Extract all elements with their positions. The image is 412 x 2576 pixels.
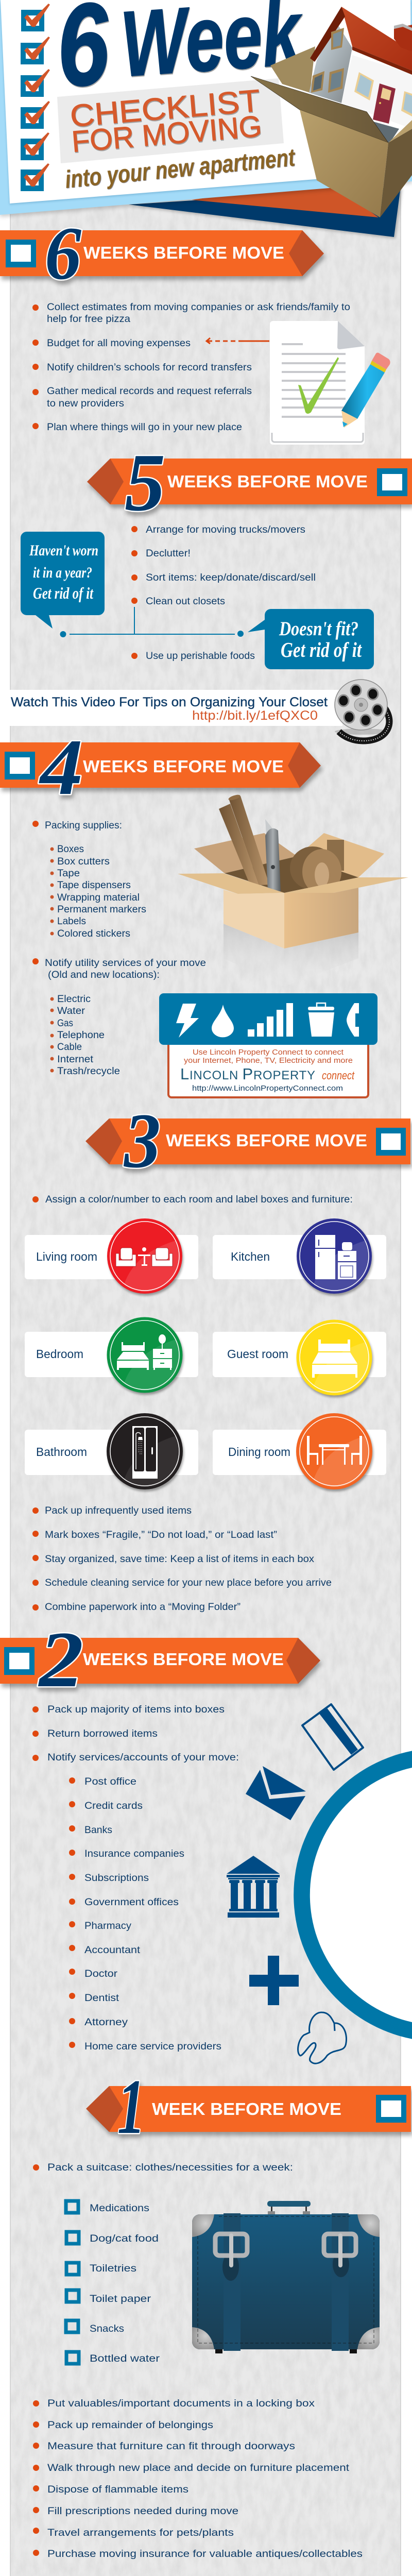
ribbon: 6 weeks before move: [0, 211, 324, 295]
item: return: Return borrowed items: [47, 1728, 158, 1739]
callout: haven't worn it: it in a year?: [33, 564, 92, 581]
check item: snacks: [66, 2320, 124, 2334]
item: medical: Gather medical records and request referrals: [47, 386, 252, 397]
item: declutter: Declutter!: [146, 548, 191, 559]
list: 6 weeks: [32, 302, 350, 433]
check item: water: Bottled water: [90, 2353, 160, 2364]
sub-list: services: [69, 1776, 221, 2052]
check item: pet food: Dog/cat food: [90, 2233, 159, 2244]
sub-list: supplies: [50, 844, 146, 939]
check item: pet food: [66, 2232, 159, 2244]
item: estimates: Collect estimates from moving companies or ask friends/family to: [47, 302, 350, 313]
ribbon number: 3: [123, 1097, 161, 1184]
check item: toilet paper: [66, 2290, 151, 2304]
item: estimates: [32, 302, 350, 325]
sub-list: supplies: Tape: [57, 868, 80, 879]
item: cleaning: Schedule cleaning service for your new place before you arrive: [45, 1578, 332, 1588]
item: closets: Clean out closets: [146, 596, 225, 607]
item: flammable: Dispose of flammable items: [47, 2484, 188, 2495]
left front flap: [178, 873, 284, 894]
box cutter: [265, 819, 281, 891]
check item: medications: Medications: [90, 2203, 149, 2214]
ribbon checkbox: [4, 1647, 35, 1675]
box reflection: [224, 924, 284, 987]
checklist: suitcase contents: [66, 2201, 160, 2364]
sub-list: services: Home care service providers: [84, 2041, 221, 2052]
list: 2 weeks: [32, 1704, 239, 2052]
callout: haven't worn it: [21, 532, 105, 629]
sub-list: supplies: Boxes: [57, 844, 84, 855]
timeline connector: [60, 607, 244, 637]
handle: [267, 2201, 311, 2214]
list: packing supplies: [32, 820, 206, 1077]
item: measure: Measure that furniture can fit through doorways: [47, 2441, 295, 2452]
ribbon heading: WEEKS BEFORE MOVE: [83, 757, 284, 776]
callout: doesn't fit: Get rid of it: [281, 638, 362, 662]
sub-list: supplies: Box cutters: [57, 856, 110, 867]
video tip band: Watch This Video For Tips on Organizing Your Closet: [11, 695, 328, 709]
item: budget: Budget for all moving expenses: [47, 338, 191, 349]
room: kitchen: Kitchen: [231, 1250, 270, 1263]
callout: doesn't fit: Doesn't fit?: [279, 618, 358, 640]
ribbon number: 2: [38, 1615, 83, 1704]
item: notify services: Notify services/accounts of your move:: [47, 1752, 239, 1763]
icon: checklist document and pencil: [270, 321, 390, 445]
large ring circle: [294, 1751, 412, 2039]
connect info card: connect: [322, 1069, 355, 1082]
sub-list: supplies: Labels: [57, 916, 86, 927]
room: guest room: [213, 1320, 386, 1395]
ribbon heading: WEEKS BEFORE MOVE: [83, 1650, 284, 1669]
sub-list: services: Subscriptions: [84, 1873, 149, 1884]
sub-list: supplies: Permanent markers: [57, 904, 146, 915]
room: bedroom: Bedroom: [36, 1347, 83, 1361]
item: stay organized: Stay organized, save time: Keep a list of items in each box: [45, 1554, 315, 1565]
item: estimates: help for free pizza: [47, 314, 130, 325]
callout: doesn't fit: [248, 609, 374, 669]
item: pets: Travel arrangements for pets/plants: [47, 2528, 234, 2538]
room: guest room: Guest room: [227, 1347, 288, 1361]
panel: utility connect: [159, 993, 377, 1097]
icon: envelope: [246, 1766, 306, 1820]
buckles: [215, 2233, 356, 2267]
room: bathroom: [25, 1413, 198, 1489]
sub-list: services: Accountant: [84, 1945, 141, 1956]
subtitle: Checklist for moving: [68, 83, 263, 159]
sub-list: utilities: Trash/recycle: [57, 1066, 120, 1077]
item: medical: [32, 386, 252, 409]
left face: [224, 890, 284, 948]
item: prescriptions: Fill prescriptions needed during move: [47, 2506, 238, 2517]
ribbon heading: WEEKS BEFORE MOVE: [166, 1131, 367, 1150]
check item: toiletries: Toiletries: [90, 2263, 136, 2274]
icon: signal bars: [248, 1003, 293, 1037]
video tip band: http://bit.ly/1efQXC0: [192, 708, 318, 723]
sub-list: supplies: Colored stickers: [57, 928, 130, 939]
straps: [224, 2213, 349, 2351]
icon: bank: [227, 1856, 280, 1918]
house in box illustration: [251, 7, 412, 217]
room: dining room: [213, 1413, 386, 1489]
sub-list: services: Post office: [84, 1776, 136, 1787]
callout: haven't worn it: Haven't worn: [29, 542, 98, 559]
ribbon: 5 weeks before move: [87, 436, 412, 528]
light blue sheet: [0, 0, 412, 215]
utility icon bar: [159, 993, 377, 1045]
box back flap: [270, 46, 315, 93]
sub-list: utilities: Cable: [57, 1042, 82, 1053]
item: notify utilities: Notify utility services of your move: [45, 958, 206, 969]
list: 5 weeks: [131, 524, 316, 662]
room: kitchen: [213, 1218, 386, 1294]
sub-list: utilities: Internet: [57, 1054, 94, 1065]
item: medical: to new providers: [47, 398, 124, 409]
ribbon checkbox: [377, 468, 407, 496]
right face: [284, 888, 358, 948]
white sheet: [1, 0, 412, 204]
ribbon number: 4: [39, 723, 83, 811]
connect info card: your Internet, Phone, TV, Electricity and more: [184, 1056, 353, 1065]
item: assign colors: Assign a color/number to each room and label boxes and furniture:: [45, 1194, 353, 1205]
box left face: [300, 110, 388, 217]
item: belongings: Pack up remainder of belongings: [47, 2420, 213, 2431]
sub-list: services: Insurance companies: [84, 1849, 184, 1859]
box front flap: [251, 76, 388, 143]
connect info card: Use Lincoln Property Connect to connect: [193, 1048, 344, 1057]
list: 1 week: [33, 2398, 363, 2560]
sub-list: services: Government offices: [84, 1897, 179, 1908]
icon: electricity: [176, 1004, 199, 1038]
house: [309, 7, 412, 144]
icon: film reel: [335, 680, 389, 741]
ribbon checkbox: [5, 752, 35, 779]
icon: tooth: [298, 2012, 347, 2063]
room: living room: Living room: [36, 1250, 97, 1263]
check item: toilet paper: Toilet paper: [90, 2294, 151, 2304]
sub-list: supplies: Tape dispensers: [57, 880, 131, 891]
cardboard tubes: [219, 804, 259, 885]
item: trucks: Arrange for moving trucks/movers: [146, 524, 305, 535]
video tip band: [0, 690, 342, 726]
subtitle: Checklist for moving: FOR MOVING: [71, 109, 263, 159]
ribbon number: 5: [125, 436, 165, 528]
tagline: into your new apartment: [64, 144, 297, 194]
sub-list: utilities: Gas: [57, 1018, 73, 1029]
icon: trash can: [308, 1003, 334, 1037]
list: 3 weeks: [32, 1505, 332, 1613]
feet: [215, 2349, 357, 2353]
box right face: [380, 129, 412, 217]
ribbon heading: WEEKS BEFORE MOVE: [83, 243, 284, 262]
item: mark boxes: Mark boxes “Fragile,” “Do not load,” or “Load last”: [45, 1530, 277, 1540]
item: foods: Use up perishable foods: [146, 651, 255, 662]
sub-list: services: Credit cards: [84, 1801, 143, 1811]
item: insurance: Purchase moving insurance for valuable antiques/collectables: [47, 2549, 363, 2560]
icon: water: [212, 1005, 234, 1037]
item: folder: Combine paperwork into a “Moving Folder”: [45, 1602, 241, 1613]
sub-list: utilities: Telephone: [57, 1030, 105, 1041]
sub-list: services: Attorney: [84, 2017, 128, 2028]
room: living room: [25, 1218, 198, 1294]
icon: suitcase: [192, 2201, 380, 2353]
ribbon number: 1: [117, 2063, 145, 2150]
connect info card: [168, 1038, 368, 1097]
connect info card: http://www.LincolnPropertyConnect.com: [192, 1084, 343, 1093]
item: walk through: Walk through new place and decide on furniture placement: [47, 2463, 350, 2473]
title: 6 Week: [54, 0, 307, 111]
item: pack a suitcase: Pack a suitcase: clothes/necessities for a week:: [47, 2162, 293, 2173]
sub-list: supplies: Wrapping material: [57, 892, 140, 903]
item: schools: Notify children’s schools for record transfers: [47, 362, 252, 373]
orange back sheet: [192, 180, 379, 217]
room: bathroom: Bathroom: [36, 1445, 87, 1459]
ribbon: 4 weeks before move: [0, 723, 321, 811]
ribbon: 3 weeks before move: [85, 1097, 410, 1184]
subtitle panel: [57, 78, 284, 163]
item: plan: Plan where things will go in your new place: [47, 422, 242, 433]
icon: open box with supplies: [178, 793, 408, 987]
icon: telephone: [347, 1003, 359, 1037]
ribbon checkbox: [376, 1128, 406, 1156]
ribbon heading: WEEKS BEFORE MOVE: [167, 472, 368, 491]
item: valuables: Put valuables/important documents in a locking box: [47, 2398, 315, 2409]
callout: haven't worn it: Get rid of it: [33, 584, 94, 602]
item: notify utilities: [32, 958, 206, 980]
sub-list: services: Pharmacy: [84, 1921, 132, 1931]
item: sort: Sort items: keep/donate/discard/sell: [146, 572, 316, 583]
box right flap: [388, 120, 412, 143]
check item: medications: [66, 2201, 149, 2214]
arrow: budget to document: [207, 338, 269, 344]
item: notify utilities: (Old and new locations):: [48, 970, 160, 980]
sub-list: utilities: [50, 994, 120, 1077]
icon: credit card: [302, 1704, 363, 1770]
item: majority: Pack up majority of items into boxes: [47, 1704, 225, 1715]
right front flap: [284, 877, 408, 893]
sub-list: utilities: Electric: [57, 994, 91, 1005]
sub-list: services: Dentist: [84, 1993, 119, 2004]
sub-list: services: Doctor: [84, 1969, 118, 1979]
subtitle: Checklist for moving: CHECKLIST: [68, 83, 262, 133]
ribbon number: 6: [45, 211, 81, 295]
item: packing heading: Packing supplies:: [45, 820, 122, 831]
back flaps: [194, 833, 297, 873]
room: dining room: Dining room: [228, 1445, 290, 1459]
item: infrequent items: Pack up infrequently used items: [45, 1505, 192, 1516]
header banner: [0, 0, 412, 237]
checkbox column: [21, 4, 50, 191]
sub-list: services: Banks: [84, 1825, 112, 1836]
ribbon: 2 weeks before move: [0, 1615, 320, 1704]
check item: snacks: Snacks: [90, 2324, 124, 2334]
tape roll: [290, 840, 344, 894]
ribbon heading: WEEK BEFORE MOVE: [152, 2099, 341, 2119]
room: bedroom: [25, 1317, 198, 1393]
sub-list: utilities: Water: [57, 1006, 85, 1016]
navy back sheet: [129, 187, 401, 237]
room cards: [25, 1218, 386, 1489]
connect info card: LINCOLN PROPERTY: [180, 1065, 315, 1083]
ribbon checkbox: [6, 240, 36, 267]
check item: toiletries: [66, 2263, 136, 2275]
ribbon checkbox: [376, 2095, 406, 2123]
ribbon: 1 week before move: [86, 2063, 411, 2150]
check item: water: [66, 2352, 160, 2364]
icon: medical plus: [249, 1956, 299, 2005]
corners: [192, 2214, 380, 2349]
